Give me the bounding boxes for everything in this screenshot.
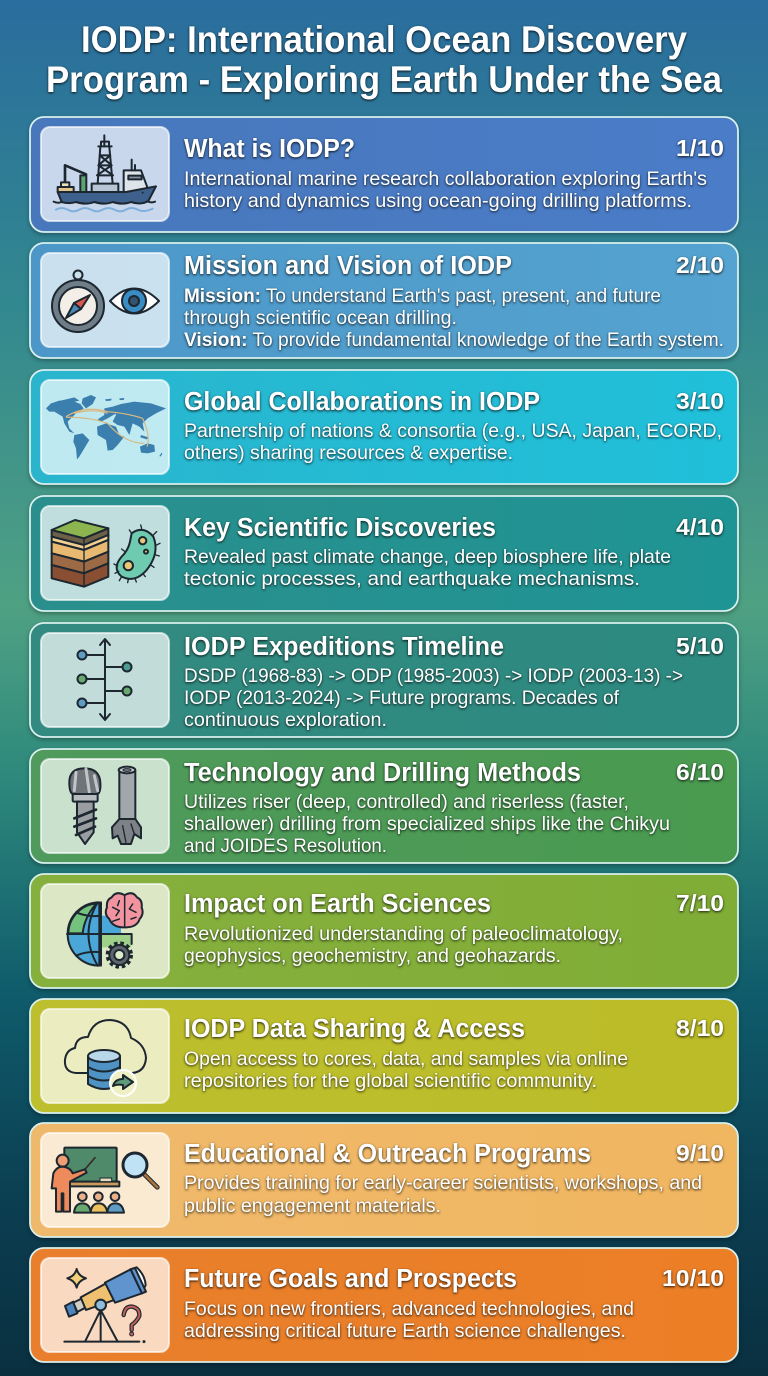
description: history and dynamics using ocean-going drilling platforms. bbox=[184, 190, 692, 212]
title: IODP: International Ocean Discovery bbox=[81, 19, 687, 60]
heading: IODP Expeditions Timeline bbox=[184, 633, 504, 661]
description bbox=[184, 791, 670, 857]
heading: Global Collaborations in IODP bbox=[184, 388, 540, 416]
step number: 9/10 bbox=[676, 1140, 724, 1166]
icon: teacher, board and magnifier bbox=[52, 1148, 157, 1213]
description: others) sharing resources & expertise. bbox=[184, 442, 513, 464]
description: International marine research collaboration exploring Earth's bbox=[184, 168, 707, 190]
heading: Key Scientific Discoveries bbox=[184, 514, 496, 542]
description: Revealed past climate change, deep biosphere life, plate bbox=[184, 546, 671, 568]
description bbox=[184, 1298, 634, 1342]
description bbox=[184, 546, 671, 590]
description: repositories for the global scientific community. bbox=[184, 1070, 597, 1092]
icon: telescope bbox=[64, 1267, 146, 1342]
title: Program - Exploring Earth Under the Sea bbox=[46, 59, 722, 100]
description: Revolutionized understanding of paleoclimatology, bbox=[184, 923, 623, 945]
panel: Key Scientific Discoveries bbox=[30, 496, 738, 611]
panel: Global Collaborations bbox=[30, 370, 738, 484]
description: public engagement materials. bbox=[184, 1195, 441, 1217]
panel: Expeditions Timeline bbox=[30, 623, 738, 737]
description: through scientific ocean drilling. bbox=[184, 307, 457, 329]
heading: Mission and Vision of IODP bbox=[184, 252, 512, 280]
step number: 10/10 bbox=[662, 1265, 724, 1291]
description: geophysics, geochemistry, and geohazards. bbox=[184, 945, 561, 967]
description: and JOIDES Resolution. bbox=[184, 835, 387, 857]
panel: Educational & Outreach bbox=[30, 1123, 738, 1237]
description: Mission: To understand Earth's past, present, and future bbox=[184, 285, 661, 307]
description: shallower) drilling from specialized ships like the Chikyu bbox=[184, 813, 670, 835]
description bbox=[184, 420, 722, 464]
description bbox=[184, 665, 683, 731]
heading: Educational & Outreach Programs bbox=[184, 1140, 591, 1168]
heading: Impact on Earth Sciences bbox=[184, 890, 491, 918]
panel: Impact on Earth Sciences bbox=[30, 874, 738, 988]
icon: globe, brain and gear bbox=[67, 893, 143, 966]
panel: Future Goals bbox=[30, 1248, 738, 1362]
description: Vision: To provide fundamental knowledge of the Earth system. bbox=[184, 329, 724, 351]
step number: 8/10 bbox=[676, 1015, 724, 1041]
description: continuous exploration. bbox=[184, 709, 387, 731]
description bbox=[184, 923, 623, 967]
description bbox=[184, 1172, 702, 1217]
icon: timeline bbox=[78, 639, 132, 720]
description bbox=[184, 168, 707, 212]
step number: 4/10 bbox=[676, 514, 724, 540]
heading: What is IODP? bbox=[184, 135, 355, 163]
description: tectonic processes, and earthquake mechanisms. bbox=[184, 568, 640, 590]
step number: 1/10 bbox=[676, 135, 724, 161]
description: addressing critical future Earth science challenges. bbox=[184, 1320, 626, 1342]
title bbox=[46, 19, 722, 100]
description: IODP (2013-2024) -> Future programs. Decades of bbox=[184, 687, 620, 709]
icon: drilling ship bbox=[54, 135, 156, 211]
icon: world map bbox=[46, 395, 166, 459]
description: Open access to cores, data, and samples via online bbox=[184, 1048, 628, 1070]
step number: 3/10 bbox=[676, 388, 724, 414]
step number: 2/10 bbox=[676, 252, 724, 278]
icon: cloud database bbox=[65, 1020, 146, 1096]
step number: 7/10 bbox=[676, 890, 724, 916]
panel: Mission and Vision bbox=[30, 243, 738, 358]
panel: What is IODP? bbox=[30, 117, 738, 232]
heading: Future Goals and Prospects bbox=[184, 1265, 517, 1293]
icon: compass and eye bbox=[52, 270, 159, 332]
description bbox=[184, 1048, 628, 1092]
description: Utilizes riser (deep, controlled) and riserless (faster, bbox=[184, 791, 629, 813]
heading: IODP Data Sharing & Access bbox=[184, 1015, 525, 1043]
heading: Technology and Drilling Methods bbox=[184, 759, 581, 787]
description: Partnership of nations & consortia (e.g., USA, Japan, ECORD, bbox=[184, 420, 722, 442]
description: Provides training for early-career scientists, workshops, and bbox=[184, 1172, 702, 1194]
icon: soil block and microbe bbox=[52, 520, 160, 587]
description: Focus on new frontiers, advanced technologies, and bbox=[184, 1298, 634, 1320]
description: DSDP (1968-83) -> ODP (1985-2003) -> IODP (2003-13) -> bbox=[184, 665, 683, 687]
panel: Data Sharing bbox=[30, 999, 738, 1113]
panel: Technology and Drilling bbox=[30, 749, 738, 863]
description bbox=[184, 285, 724, 351]
step number: 6/10 bbox=[676, 759, 724, 785]
step number: 5/10 bbox=[676, 633, 724, 659]
icon: drill bits bbox=[69, 767, 141, 844]
